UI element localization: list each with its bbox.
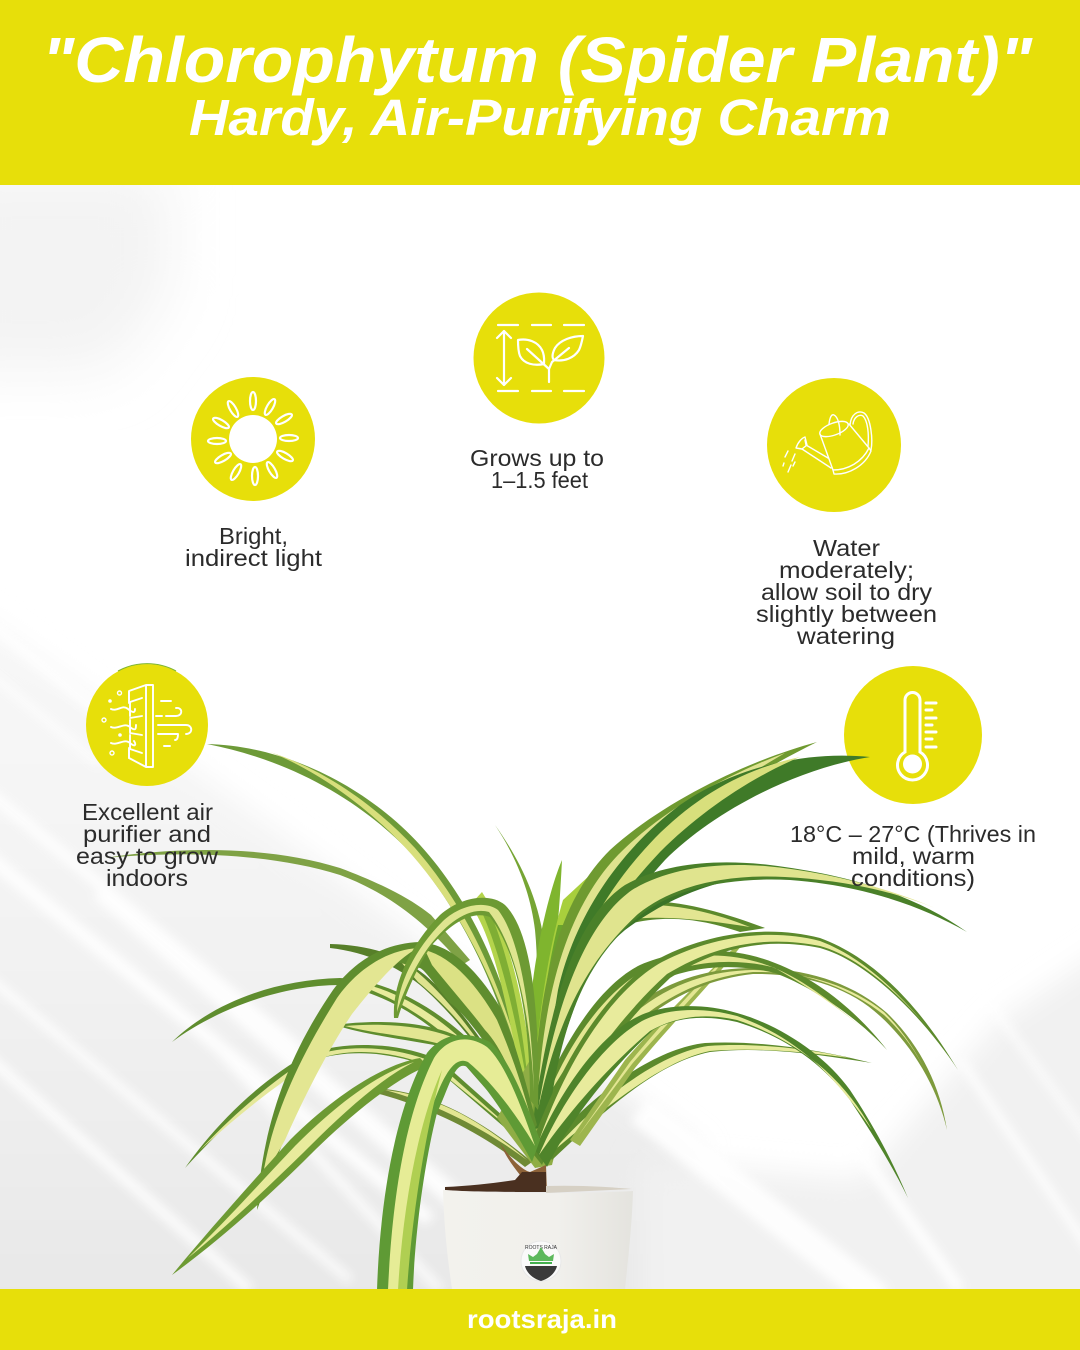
center upright leaves — [470, 825, 590, 1168]
icon: watering can — [767, 378, 901, 512]
pot — [443, 1190, 633, 1289]
label: temperature: 18°C – 27°C (Thrives in — [790, 821, 1036, 847]
label: air purifier: Excellent air — [82, 799, 213, 825]
label: grows up to: Grows up to — [470, 445, 604, 471]
pot badge logo — [521, 1241, 561, 1281]
right leaves — [530, 742, 967, 1198]
label: water: allow soil to dry — [761, 579, 933, 605]
label: air purifier: purifier and — [83, 821, 211, 847]
label: light: Bright, — [219, 523, 288, 549]
icon: sun — [191, 377, 315, 501]
back leaves — [105, 744, 532, 1168]
label: temperature — [790, 821, 1036, 891]
label: temperature: conditions) — [851, 865, 975, 891]
label: water: moderately; — [779, 557, 914, 583]
title — [42, 24, 1033, 146]
header band — [0, 0, 1080, 185]
label: air purifier — [76, 799, 218, 891]
title: Hardy, Air-Purifying Charm — [189, 89, 891, 146]
label: light — [185, 523, 323, 571]
label: grows up to — [470, 445, 604, 493]
label: water: Water — [813, 535, 880, 561]
title: "Chlorophytum (Spider Plant)" — [42, 24, 1033, 96]
label: light: indirect light — [185, 545, 323, 571]
label: water: watering — [796, 623, 895, 649]
spider plant in pot — [105, 742, 967, 1290]
label: air purifier: indoors — [106, 865, 188, 891]
icon: thermometer — [844, 666, 982, 804]
label: water — [756, 535, 937, 649]
label: air purifier: easy to grow — [76, 843, 218, 869]
label: water: slightly between — [756, 601, 937, 627]
icon: plant height — [474, 292, 604, 424]
footer band — [0, 1289, 1080, 1350]
trunk and soil — [445, 1143, 632, 1193]
icon: air purifier — [86, 664, 208, 786]
label: temperature: mild, warm — [852, 843, 975, 869]
label: grows up to: 1–1.5 feet — [491, 467, 589, 493]
footer website: rootsraja.in — [467, 1304, 617, 1334]
pot badge logo: ROOTS RAJA — [525, 1245, 558, 1251]
left leaves — [172, 898, 540, 1290]
